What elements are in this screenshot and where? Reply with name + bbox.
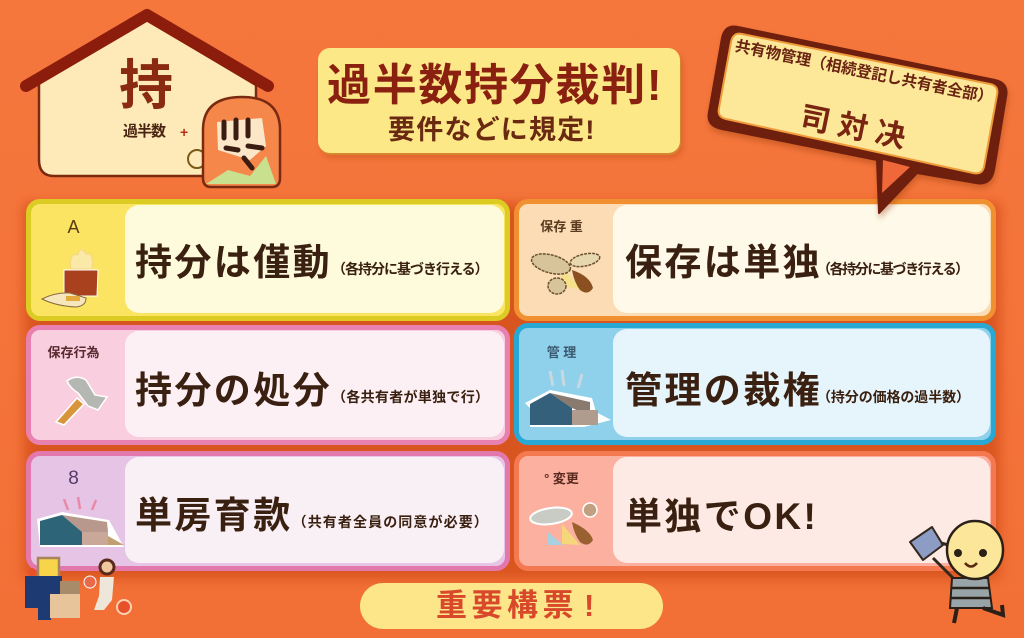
- card C heading: 単房育款（共有者全員の同意が必要）: [135, 495, 489, 536]
- card C icon: [37, 496, 124, 547]
- body: [950, 578, 992, 608]
- title panel: [318, 48, 680, 153]
- card B icon: [54, 376, 108, 426]
- card E icon: [525, 370, 611, 427]
- card C: [26, 451, 510, 571]
- house sign: [20, 8, 282, 188]
- card B heading: 持分の処分（各共有者が単独で行）: [135, 370, 489, 411]
- callout emphasis: 司 対 决: [797, 101, 908, 155]
- card E heading: 管理の裁権（持分の価格の過半数）: [625, 370, 970, 411]
- callout text: 共有物管理（相続登記し共有者全部）: [733, 38, 994, 107]
- card A tag: A: [67, 217, 80, 237]
- card A body: [125, 205, 504, 313]
- hammer: [56, 377, 107, 425]
- card D tag: 保存 重: [540, 219, 583, 234]
- card F tag: ° 変更: [544, 471, 579, 486]
- figure: [84, 560, 131, 614]
- callout: [706, 26, 1010, 220]
- card B: [26, 325, 510, 445]
- head: [947, 521, 1003, 579]
- house heading: 持: [119, 56, 173, 116]
- bottom left illustration: [25, 556, 132, 620]
- card F body: [613, 457, 990, 563]
- card C body: [125, 457, 504, 563]
- bottom banner: 重要構票!: [436, 588, 599, 623]
- house icon tile: [203, 97, 280, 187]
- card D heading: 保存は単独（各持分に基づき行える）: [625, 242, 968, 283]
- house: [525, 370, 611, 427]
- card F icon: [529, 502, 598, 545]
- house caption: 過半数: [123, 123, 165, 140]
- barn: [37, 497, 124, 547]
- mascot: [909, 520, 1006, 624]
- stacked boxes: [25, 558, 80, 620]
- sign: [910, 527, 943, 560]
- card A heading: 持分は僅動（各持分に基づき行える）: [135, 242, 488, 283]
- card D body: [613, 205, 990, 313]
- card E tag: 管 理: [547, 345, 576, 360]
- house knob: [188, 150, 206, 168]
- house body: [39, 20, 256, 176]
- card C tag: 8: [68, 468, 79, 489]
- card D: [514, 199, 996, 321]
- tools: [529, 250, 601, 294]
- card E body: [613, 329, 990, 437]
- house roof: [26, 15, 268, 86]
- tools: [529, 503, 597, 545]
- house mark: +: [180, 124, 188, 140]
- bottom banner: [360, 583, 663, 629]
- title: 過半数持分裁判!: [327, 61, 663, 110]
- card B body: [125, 331, 504, 437]
- callout bubble: [709, 26, 1007, 213]
- card D icon: [530, 252, 600, 295]
- card F: [514, 451, 996, 571]
- card A icon: [41, 249, 98, 308]
- card E: [514, 323, 996, 445]
- card B tag: 保存行為: [47, 345, 100, 360]
- card F heading: 単独でOK!: [625, 496, 818, 537]
- subtitle: 要件などに規定!: [388, 115, 596, 145]
- card A: [26, 199, 510, 321]
